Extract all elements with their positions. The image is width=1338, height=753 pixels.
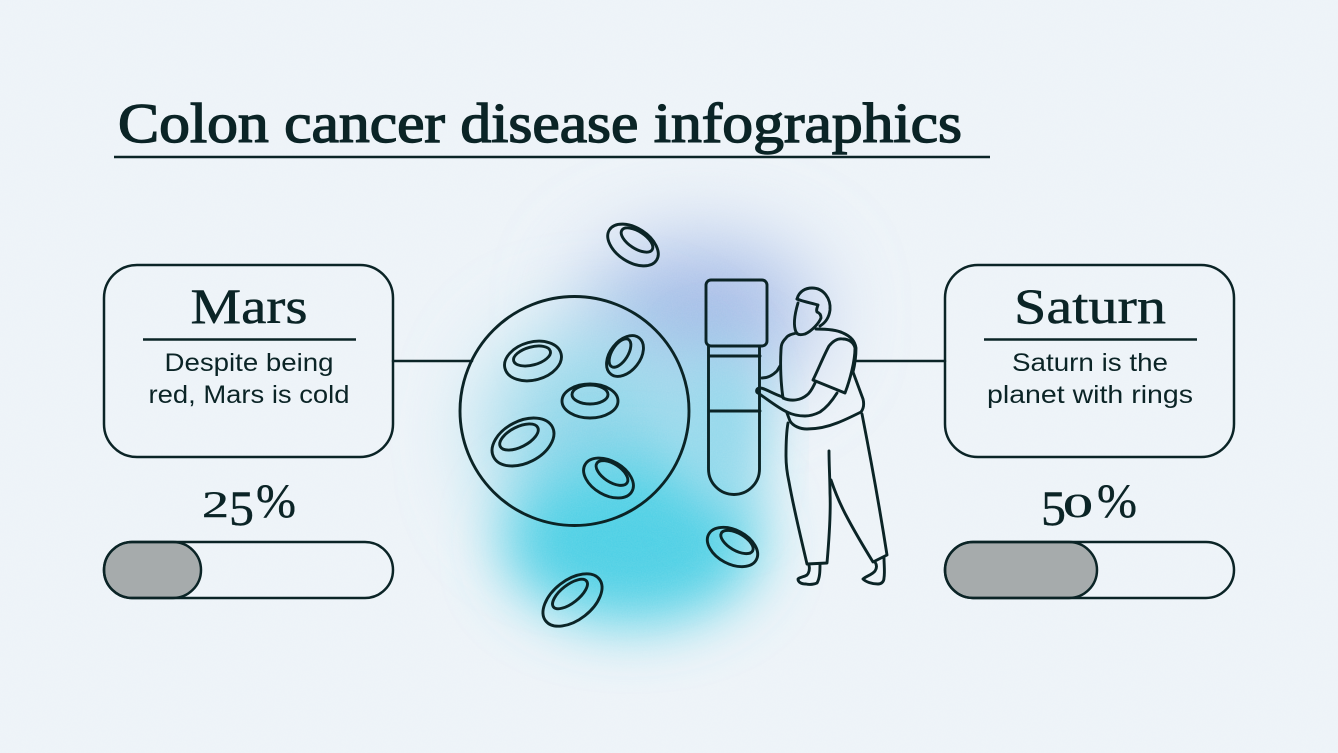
panel: Saturn [945, 265, 1234, 457]
gradient blob behind illustration [490, 243, 815, 624]
text: Saturn description: Saturn is the [1012, 349, 1168, 377]
percentage: 25%: 2 [202, 485, 229, 526]
percentage: 25%: 5 [229, 480, 254, 536]
percentage: 50%: % [1097, 475, 1137, 528]
connector: Mars to circle [393, 360, 472, 362]
heading: Saturn: Saturn [1014, 278, 1166, 334]
text: Saturn description: planet with rings [987, 381, 1193, 409]
floating cell: bottom [533, 563, 612, 637]
microscope circle with cells [460, 296, 689, 526]
panel: Mars [104, 265, 393, 457]
progress bar: 25% [104, 542, 393, 598]
text: Mars description: Despite being [164, 349, 334, 377]
percentage: 50%: 0 [1063, 488, 1093, 525]
progress bar: 50% [945, 542, 1234, 598]
person holding test tube [757, 288, 887, 584]
title: Colon cancer disease infographics [118, 93, 962, 155]
test tube [706, 280, 767, 494]
percentage: 50%: 5 [1041, 480, 1066, 536]
connector: Saturn to person [857, 360, 945, 362]
percentage: 25%: % [256, 475, 296, 528]
heading: Mars: Mars [190, 278, 308, 334]
text: Mars description: red, Mars is cold [148, 381, 350, 409]
floating cell: right [701, 519, 764, 575]
floating cell: top [600, 215, 666, 275]
